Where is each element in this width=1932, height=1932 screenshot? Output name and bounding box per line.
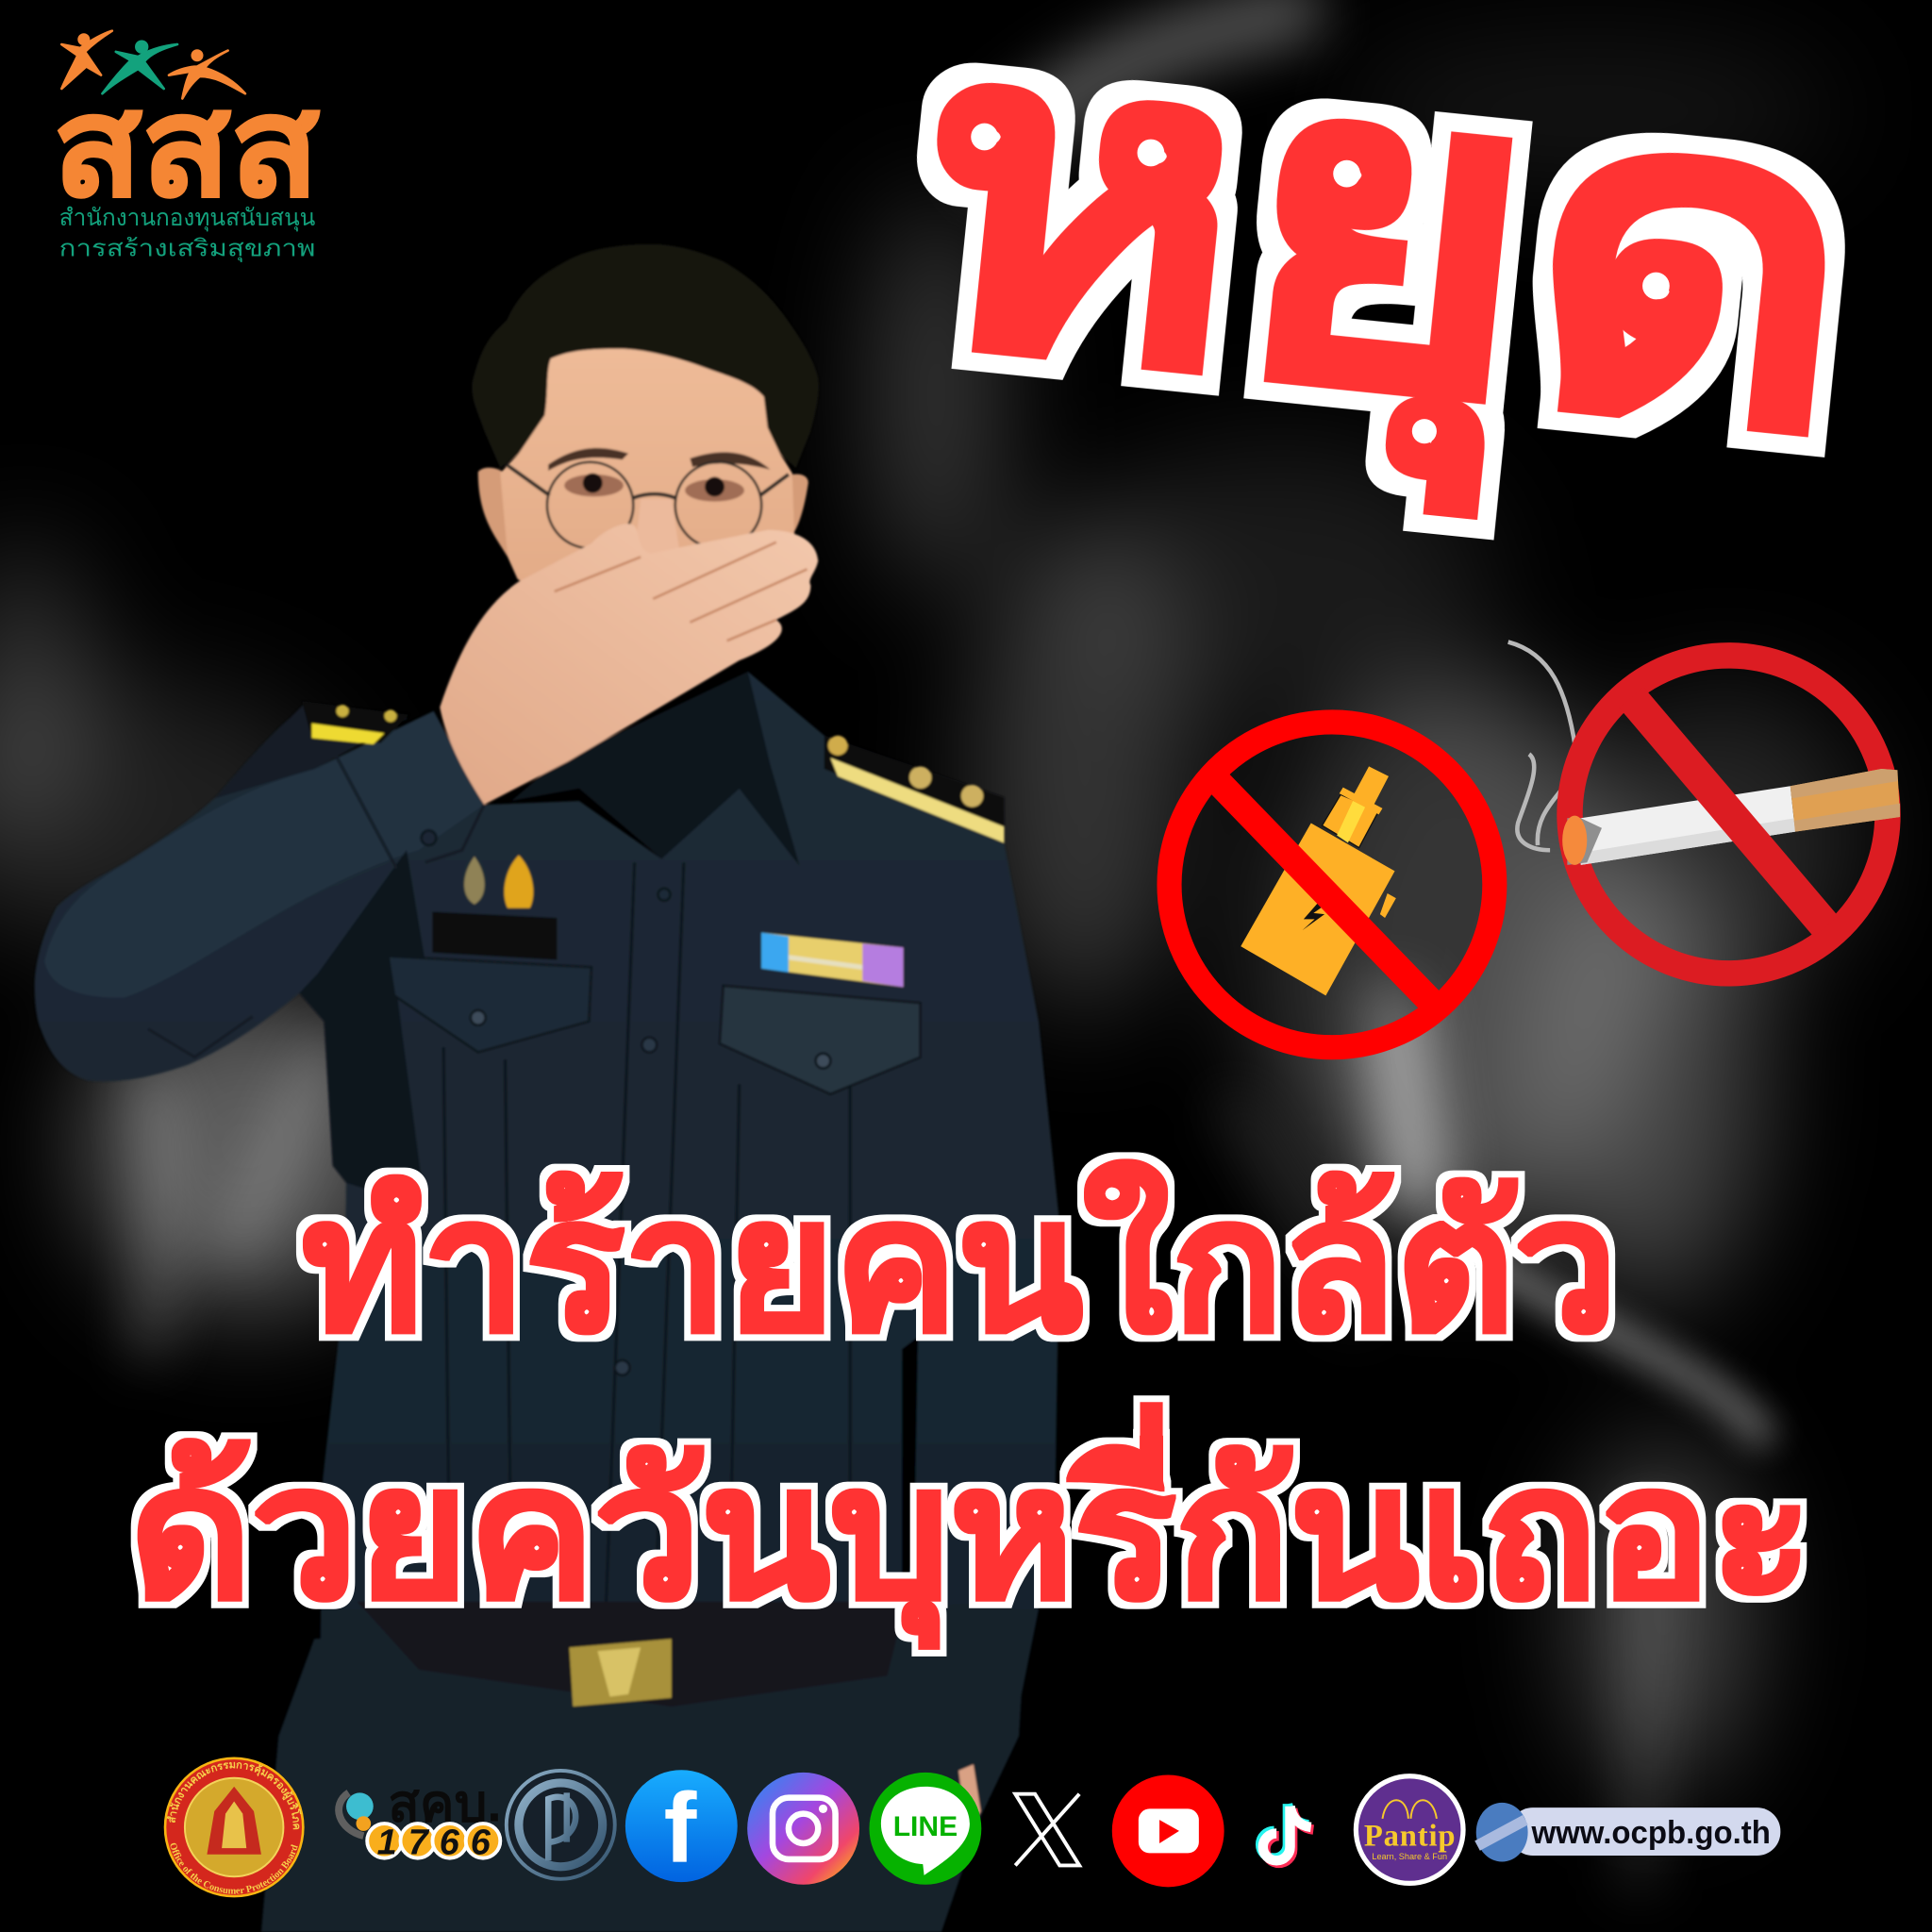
hair (472, 244, 819, 468)
buttons (422, 830, 830, 1375)
icon: LINE (869, 1773, 981, 1885)
vape device (1241, 766, 1396, 995)
icon: Pantip: Pantip (1364, 1820, 1456, 1854)
icon: hotline 1766: สคบ. (388, 1774, 502, 1832)
wrist in pocket (958, 1764, 981, 1836)
icon: Facebook: f (664, 1774, 697, 1884)
face (500, 349, 794, 641)
logo: ThaiHealth (53, 31, 320, 263)
footer icons row (164, 1757, 1781, 1898)
belt and buckle (358, 1602, 906, 1707)
icon: no vape (1170, 722, 1494, 1047)
icon: Instagram (747, 1773, 859, 1885)
shirt seams (443, 862, 850, 1602)
logo org name: สำนักงานกองทุนสนับสนุน (59, 206, 315, 232)
dark side of torso (299, 850, 425, 1208)
ribbon bar (761, 933, 903, 987)
logo wordmark: สสส (53, 70, 320, 224)
icon: OCPB seal (164, 1757, 305, 1898)
icon: OCPB seal: Office of the Consumer Protection Board (170, 1843, 298, 1894)
arm details (148, 754, 484, 1058)
headline line 1: ทำร้ายคนใกล้ตัว (302, 1159, 1618, 1369)
gap between arm and torso (902, 1337, 918, 1602)
icon: hotline 1766: 1766 (377, 1824, 491, 1863)
left pocket flap (388, 957, 591, 1052)
person: officer covering mouth (35, 244, 1059, 1932)
icon: X (1015, 1794, 1079, 1865)
icon: OCPB emblem (507, 1771, 615, 1879)
collar (511, 672, 800, 866)
hand over mouth (440, 524, 818, 805)
icon: OCPB seal: สำนักงานคณะกรรมการคุ้มครองผู้บริโภค (167, 1762, 302, 1830)
website pill: www.ocpb.go.th (1531, 1815, 1771, 1851)
left epaulette (302, 701, 409, 744)
website pill (1476, 1803, 1780, 1862)
headline line 2: ด้วยควันบุหรี่กันเถอะ (129, 1404, 1812, 1649)
icon: YouTube (1112, 1774, 1224, 1887)
nose (635, 499, 680, 555)
left shoulder behind arm (214, 704, 408, 798)
icon: Pantip (1356, 1776, 1463, 1883)
cigarette (1562, 769, 1900, 865)
glasses (507, 462, 789, 548)
icon: LINE: LINE (893, 1811, 958, 1842)
right epaulette (824, 736, 1004, 842)
logo figures (61, 31, 245, 98)
icon: Facebook (625, 1770, 738, 1884)
icon: hotline 1766 (339, 1774, 502, 1863)
smoke lines from cigarette (1508, 641, 1576, 850)
icon: TikTok (1260, 1804, 1313, 1863)
badges and name tag (432, 855, 557, 959)
icon: Pantip: Learn, Share & Fun (1372, 1852, 1447, 1861)
ears (478, 468, 808, 557)
sleeve highlight (44, 711, 484, 998)
uniform torso and raised arm (35, 672, 1059, 1932)
right pocket flap (720, 986, 921, 1094)
eyes (564, 474, 744, 502)
eyebrows (548, 448, 770, 471)
icon: no smoking (1562, 656, 1900, 974)
pants (261, 1602, 1022, 1932)
logo org name line 2: การสร้างเสริมสุขภาพ (59, 237, 315, 263)
